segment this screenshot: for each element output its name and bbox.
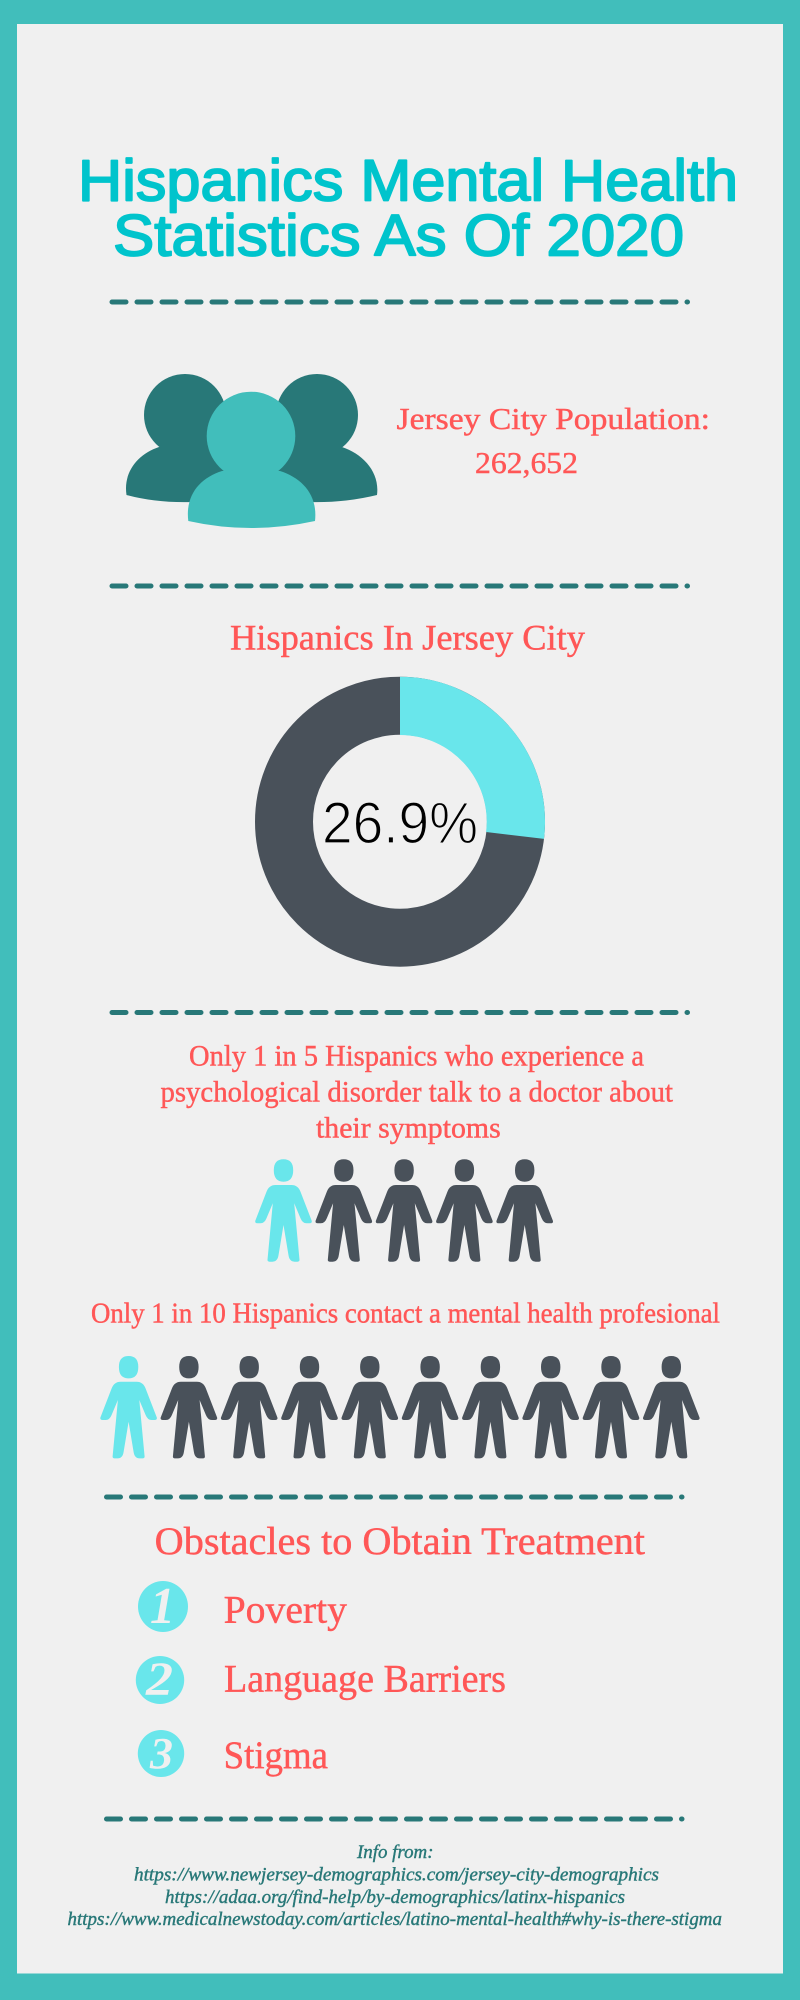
donut chart: 26.9%: 26.9% — [322, 791, 478, 856]
text: 1 in 5 statistic: Only 1 in 5 Hispanics who experience a — [189, 1040, 644, 1073]
text: 1 in 5 statistic — [160, 1040, 674, 1145]
list item: poverty: Poverty — [224, 1589, 348, 1632]
list item: stigma: Stigma — [224, 1734, 328, 1777]
heading: Hispanics in Jersey City: Hispanics In Jersey City — [230, 618, 585, 658]
heading: obstacles: Obstacles to Obtain Treatment — [155, 1520, 645, 1563]
footer: sources: Info from: — [356, 1843, 434, 1863]
list item: stigma: 3 — [149, 1729, 173, 1778]
icon: group of people — [126, 374, 377, 528]
population text: 262,652 — [475, 445, 578, 480]
pictogram: 1 in 10 people — [100, 1356, 700, 1458]
population text: Jersey City Population: — [396, 401, 710, 436]
text: 1 in 5 statistic: psychological disorder talk to a doctor about — [160, 1076, 674, 1109]
title: Hispanics Mental Health — [78, 148, 738, 214]
list item: language barriers — [136, 1653, 506, 1706]
population text — [396, 401, 710, 480]
list item: language barriers: 2 — [145, 1653, 173, 1706]
text: 1 in 5 statistic: their symptoms — [316, 1112, 501, 1145]
list item: stigma — [138, 1729, 328, 1778]
text: 1 in 10 statistic: Only 1 in 10 Hispanics contact a mental health profesional — [91, 1298, 720, 1330]
title — [78, 148, 738, 268]
footer: sources: https://www.medicalnewstoday.com/articles/latino-mental-health#why-is-there-stigma — [68, 1910, 722, 1930]
list item: poverty: 1 — [150, 1578, 175, 1635]
donut chart: 26.9% — [284, 677, 545, 938]
list item: poverty — [138, 1578, 348, 1635]
pictogram: 1 in 5 people — [255, 1159, 553, 1262]
footer: sources — [68, 1843, 722, 1930]
footer: sources: https://www.newjersey-demographics.com/jersey-city-demographics — [134, 1866, 659, 1886]
footer: sources: https://adaa.org/find-help/by-demographics/latinx-hispanics — [165, 1888, 625, 1908]
title: Statistics As Of 2020 — [113, 204, 684, 268]
list item: language barriers: Language Barriers — [224, 1658, 506, 1701]
